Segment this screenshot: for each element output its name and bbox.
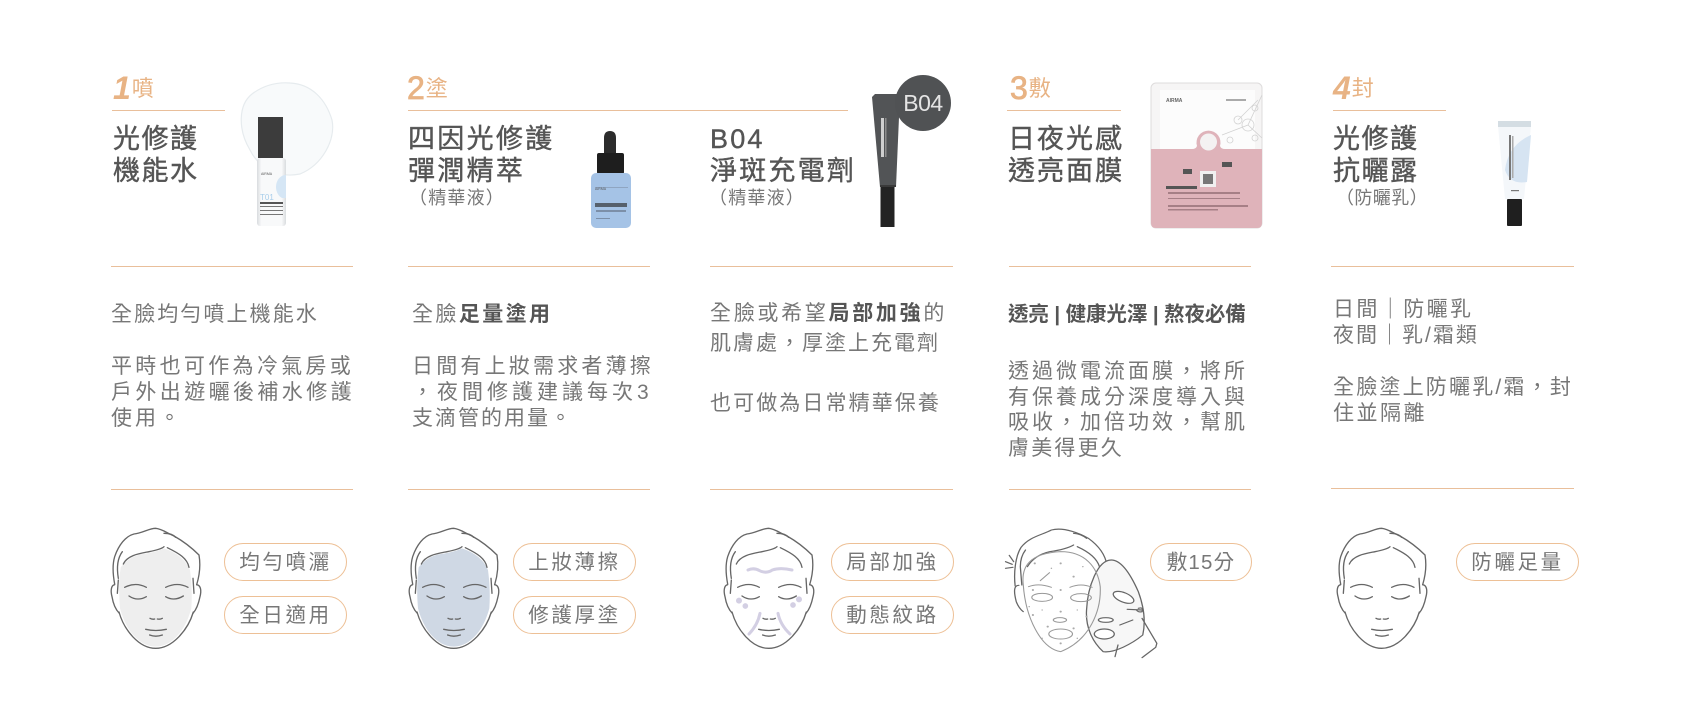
rule (408, 488, 650, 490)
icon: applying sheet mask (1004, 528, 1158, 658)
rule (710, 266, 953, 267)
tag: enough sunscreen: 防曬足量 (1471, 551, 1564, 574)
tag: local boost: 局部加強 (846, 551, 939, 574)
tag: 15 minutes (1150, 543, 1252, 581)
badge: B04: B04 (903, 90, 943, 116)
tag: thick repair layer (513, 596, 636, 634)
product name (1008, 124, 1124, 186)
rule (1009, 488, 1251, 490)
usage text (111, 302, 355, 430)
product image: blue serum dropper (591, 131, 631, 228)
tag: even spray: 均勻噴灑 (239, 551, 332, 574)
usage text: 肌膚處，厚塗上充電劑 (710, 332, 940, 355)
usage text (1008, 360, 1248, 460)
usage text: 吸收，加倍功效，幫肌 (1008, 411, 1248, 434)
product image: sunscreen tube (1498, 121, 1531, 226)
product name: 光修護 (113, 124, 198, 154)
usage text: 透過微電流面膜，將所 (1008, 360, 1248, 383)
product name: 四因光修護 (408, 124, 554, 154)
step 2 heading rule (408, 110, 848, 111)
usage text: 日間｜防曬乳 (1333, 298, 1473, 321)
product type: （防曬乳） (1336, 188, 1428, 208)
icon: plain face (1336, 528, 1428, 649)
panel: step 1 spray (110, 70, 355, 649)
product image: mask pack: AIRMA (1166, 98, 1183, 104)
usage text: 膚美得更久 (1008, 437, 1124, 460)
product name (113, 124, 198, 186)
product image: toner bottle: T01 (260, 193, 274, 202)
tag: enough sunscreen (1456, 543, 1579, 581)
usage text: 全臉或希望局部加強的 (710, 302, 947, 325)
usage text: 使用。 (111, 406, 183, 430)
product image: dark tube (872, 94, 899, 227)
tag: all day: 全日適用 (239, 604, 332, 627)
tag: 15 minutes: 敷15分 (1167, 551, 1235, 574)
icon: face with wrinkle zones (724, 528, 814, 649)
step 2 heading: 2塗 (407, 70, 448, 106)
step 1 heading: 1噴 (113, 70, 154, 106)
usage text: 日間有上妝需求者薄擦 (412, 354, 654, 378)
step 1 heading rule (112, 110, 225, 111)
rule (1331, 266, 1574, 267)
product type: （精華液） (409, 188, 505, 208)
product name: 日夜光感 (1008, 124, 1124, 154)
usage text (710, 302, 947, 415)
usage text (412, 302, 654, 430)
product name: 機能水 (113, 156, 198, 186)
product name: 彈潤精萃 (408, 156, 525, 186)
product image: mask pack (1150, 82, 1262, 228)
panel: step 2 B04 (709, 75, 954, 649)
rule (111, 266, 353, 267)
usage text: 全臉足量塗用 (412, 302, 552, 326)
product name: 光修護 (1333, 124, 1418, 154)
panel: step 4 sunscreen (1331, 70, 1579, 649)
product image: toner bottle: AIRMA (261, 172, 273, 176)
tag: thick repair layer: 修護厚塗 (528, 604, 621, 627)
usage text: 支滴管的用量。 (412, 406, 573, 430)
tag: expression lines: 動態紋路 (846, 604, 939, 627)
product name: B04 (710, 124, 765, 154)
usage text: 戶外出遊曬後補水修護 (111, 380, 355, 404)
usage text (1333, 298, 1573, 425)
usage text: 全臉均勻噴上機能水 (111, 302, 319, 326)
product type: （精華液） (709, 188, 805, 208)
tag: thin makeup layer: 上妝薄擦 (528, 551, 621, 574)
badge: B04 (895, 75, 951, 131)
rule (710, 488, 953, 490)
usage text: 住並隔離 (1333, 402, 1427, 425)
icon: face with grey fill (110, 528, 202, 649)
rule (408, 266, 650, 267)
benefit line: 透亮 | 健康光澤 | 熬夜必備 (1008, 303, 1246, 326)
usage text: 也可做為日常精華保養 (710, 392, 941, 415)
product image: blue serum dropper: AIRMA (595, 187, 607, 191)
tag: all day (224, 596, 347, 634)
usage text: 平時也可作為冷氣房或 (111, 354, 354, 378)
step 3 heading: 3敷 (1010, 70, 1051, 106)
product name (710, 124, 856, 186)
product name: 淨斑充電劑 (710, 156, 856, 186)
panel: step 2 serum (408, 124, 654, 649)
rule (1331, 488, 1574, 489)
tag: expression lines (831, 596, 954, 634)
panel: step 3 mask (1004, 70, 1262, 658)
usage text: 全臉塗上防曬乳/霜，封 (1333, 376, 1573, 399)
product image: toner bottle (240, 82, 334, 226)
product name (1333, 124, 1418, 186)
step 3 heading rule (1007, 110, 1121, 111)
tag: even spray (224, 543, 347, 581)
usage text: 有保養成分深度導入與 (1008, 386, 1248, 409)
usage text: 夜間｜乳/霜類 (1333, 324, 1479, 347)
tag: thin makeup layer (513, 543, 636, 581)
tag: local boost (831, 543, 954, 581)
icon: face with blue fill (408, 528, 500, 649)
usage text: ，夜間修護建議每次3 (412, 380, 653, 404)
step 4 heading rule (1333, 110, 1446, 111)
product name (408, 124, 554, 186)
product name: 透亮面膜 (1008, 156, 1124, 186)
rule (111, 488, 353, 490)
product name: 抗曬露 (1333, 156, 1418, 186)
step 4 heading: 4封 (1333, 70, 1374, 106)
rule (1009, 266, 1251, 267)
